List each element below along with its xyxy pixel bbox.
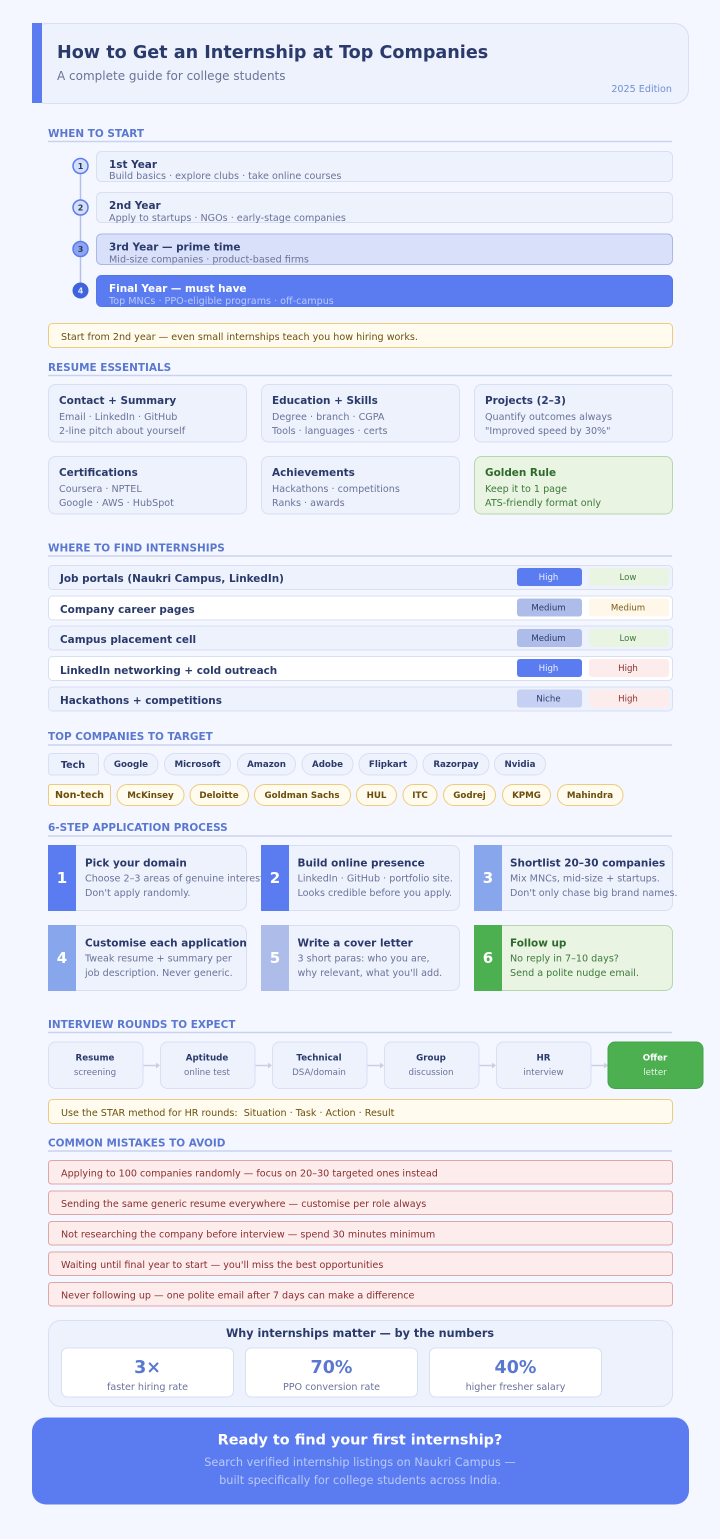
non-tech companies: [48, 784, 623, 806]
heading: application process: 6-STEP APPLICATION PROCESS: [48, 822, 228, 834]
year 1: [73, 152, 672, 182]
step 6: Follow up: [510, 938, 566, 950]
step 1: Don't apply randomly.: [85, 888, 190, 899]
step 6: 6: [483, 949, 493, 967]
edition label: 2025 Edition: [611, 84, 672, 95]
timeline: [72, 152, 672, 307]
round: aptitude: online test: [184, 1068, 231, 1078]
row: linkedin networking: [48, 656, 672, 680]
row: hackathons: Niche: [536, 694, 561, 704]
chip names: Goldman Sachs: [264, 791, 340, 801]
stat: ppo conversion: PPO conversion rate: [283, 1382, 380, 1393]
mistake 5: [48, 1282, 672, 1306]
cta text: built specifically for college students across India.: [219, 1474, 501, 1487]
chip names: Flipkart: [369, 760, 407, 770]
heading: top companies: TOP COMPANIES TO TARGET: [48, 731, 214, 743]
stat: hiring rate: 3×: [134, 1358, 161, 1378]
stat: hiring rate: faster hiring rate: [107, 1382, 188, 1393]
process steps: [48, 845, 678, 991]
round: resume: screening: [74, 1068, 116, 1078]
round: resume: [48, 1042, 143, 1088]
tip: star method: Use the STAR method for HR rounds: Situation · Task · Action · Result: [61, 1108, 395, 1119]
card: education: Tools · languages · certs: [271, 426, 387, 437]
year 2: Apply to startups · NGOs · early-stage companies: [109, 213, 346, 224]
stat: salary: 40%: [495, 1358, 536, 1378]
step 2: Looks credible before you apply.: [298, 888, 452, 899]
label: non-tech: [48, 784, 110, 806]
stat: ppo conversion: [246, 1348, 418, 1397]
card: certifications: Coursera · NPTEL: [59, 484, 142, 495]
step 1: Choose 2–3 areas of genuine interest.: [85, 874, 267, 884]
chip names: HUL: [367, 791, 387, 801]
year 2: 2nd Year: [109, 200, 162, 212]
step 6: Send a polite nudge email.: [510, 968, 639, 979]
step 1: Pick your domain: [85, 858, 187, 870]
card: contact: Contact + Summary: [59, 395, 176, 407]
step 3: Don't only chase big brand names.: [510, 888, 678, 899]
chip names: ITC: [412, 791, 428, 801]
chips: [117, 784, 623, 806]
card: golden rule: Keep it to 1 page: [485, 484, 567, 495]
stat: hiring rate: [62, 1348, 234, 1397]
mistake 5: Never following up — one polite email after 7 days can make a difference: [61, 1290, 415, 1302]
card: golden rule: Golden Rule: [485, 467, 556, 479]
title: How to Get an Internship at Top Companies: [57, 43, 488, 63]
step 5: [261, 925, 460, 991]
chips: [104, 754, 546, 775]
heading: common mistakes: COMMON MISTAKES TO AVOID: [48, 1138, 226, 1150]
card: education: [262, 384, 460, 442]
step 6: No reply in 7–10 days?: [510, 954, 619, 964]
row: job portals: High: [539, 573, 558, 583]
card: certifications: Certifications: [59, 467, 138, 479]
stat: salary: higher fresher salary: [466, 1382, 566, 1393]
stat: salary: [430, 1348, 602, 1397]
year 3: 3: [78, 245, 83, 254]
card: contact: Email · LinkedIn · GitHub: [59, 412, 177, 423]
chip names: Godrej: [453, 791, 486, 801]
round: technical: Technical: [296, 1054, 342, 1064]
step 3: 3: [483, 869, 493, 887]
step 2: [261, 845, 460, 911]
step 4: job description. Never generic.: [84, 968, 233, 979]
tech companies: [48, 754, 546, 775]
row: linkedin networking: LinkedIn networking + cold outreach: [60, 665, 277, 677]
label: non-tech: Non-tech: [55, 790, 104, 801]
row: career pages: Medium: [531, 604, 566, 614]
call to action: [32, 1418, 689, 1504]
tip: start early: Start from 2nd year — even small internships teach you how hiring works.: [61, 332, 418, 343]
header panel: [32, 23, 688, 104]
step 4: Customise each application: [85, 938, 247, 950]
row: linkedin networking: High: [618, 664, 638, 674]
card: certifications: Google · AWS · HubSpot: [59, 498, 174, 509]
subtitle: A complete guide for college students: [57, 69, 286, 83]
step 3: [474, 845, 678, 911]
step 6: [474, 925, 672, 991]
round: group: Group: [416, 1054, 446, 1064]
round: aptitude: Aptitude: [186, 1054, 228, 1064]
card: projects: [474, 384, 672, 442]
label: tech: Tech: [61, 760, 85, 771]
year 4: 4: [78, 286, 84, 296]
card: projects: Quantify outcomes always: [485, 412, 612, 423]
year 3: 3rd Year — prime time: [109, 242, 240, 254]
card: certifications: [48, 456, 246, 514]
mistake 4: Waiting until final year to start — you'll miss the best opportunities: [61, 1260, 383, 1271]
round: technical: DSA/domain: [292, 1068, 346, 1078]
step 3: Shortlist 20–30 companies: [510, 858, 665, 870]
heading: resume essentials: RESUME ESSENTIALS: [48, 362, 171, 374]
heading: where to find: WHERE TO FIND INTERNSHIPS: [48, 542, 225, 554]
row: hackathons: [48, 687, 672, 711]
row: job portals: [48, 566, 672, 590]
stats panel: [48, 1320, 672, 1406]
chip names: Deloitte: [199, 791, 239, 801]
row: career pages: [48, 596, 672, 620]
row: hackathons: Hackathons + competitions: [60, 695, 222, 707]
cta title: Ready to find your first internship?: [218, 1432, 502, 1448]
step 2: LinkedIn · GitHub · portfolio site.: [298, 874, 453, 884]
stat: ppo conversion: 70%: [311, 1358, 352, 1378]
mistake 4: [48, 1252, 672, 1276]
row: hackathons: High: [618, 694, 638, 704]
year 1: 1st Year: [109, 159, 158, 171]
mistake 1: [48, 1160, 672, 1184]
card: education: Degree · branch · CGPA: [272, 412, 385, 423]
round: hr: [496, 1042, 591, 1088]
chip names: Google: [114, 760, 148, 770]
row: campus cell: Low: [620, 634, 636, 644]
row: job portals: Low: [620, 573, 636, 583]
row: campus cell: Campus placement cell: [60, 634, 196, 646]
step 2: Build online presence: [298, 858, 425, 870]
year 4: Final Year — must have: [109, 283, 246, 295]
card: achievements: Ranks · awards: [272, 498, 345, 509]
row: career pages: Medium: [611, 604, 645, 614]
card: achievements: Hackathons · competitions: [272, 484, 400, 495]
round: offer: [608, 1042, 703, 1088]
card: achievements: Achievements: [272, 467, 355, 479]
year 2: [73, 192, 672, 224]
chip names: McKinsey: [127, 791, 174, 801]
mistake 2: Sending the same generic resume everywhere — customise per role always: [61, 1199, 426, 1210]
row: linkedin networking: High: [539, 664, 558, 674]
chip names: [114, 760, 536, 770]
chip names: Microsoft: [174, 760, 221, 770]
cta text: Search verified internship listings on Naukri Campus —: [204, 1456, 516, 1469]
row: campus cell: [48, 626, 672, 650]
chip names: Mahindra: [567, 791, 613, 801]
year 1: Build basics · explore clubs · take online courses: [109, 171, 341, 182]
step 5: why relevant, what you'll add.: [298, 968, 442, 979]
card: education: Education + Skills: [272, 395, 378, 407]
chip names: Razorpay: [433, 760, 479, 770]
step 5: 3 short paras: who you are,: [298, 954, 430, 964]
chip names: KPMG: [512, 791, 541, 801]
year 2: 2: [78, 204, 83, 212]
round: hr: HR: [537, 1054, 551, 1064]
step 5: Write a cover letter: [298, 938, 414, 950]
mistake 3: [48, 1222, 672, 1245]
row: job portals: Job portals (Naukri Campus, LinkedIn): [59, 573, 284, 585]
year 4: Top MNCs · PPO-eligible programs · off-campus: [108, 296, 334, 307]
step 4: Tweak resume + summary per: [84, 954, 232, 964]
mistakes list: [48, 1160, 672, 1306]
round: offer: letter: [643, 1068, 667, 1078]
step 2: 2: [270, 869, 280, 887]
mistake 3: Not researching the company before interview — spend 30 minutes minimum: [61, 1230, 435, 1240]
internship sources table: [48, 566, 672, 711]
card: projects: Projects (2–3): [485, 395, 566, 407]
mistake 2: [48, 1191, 672, 1214]
cta text: [204, 1456, 516, 1487]
heading: interview rounds: INTERVIEW ROUNDS TO EXPECT: [48, 1019, 236, 1031]
arrows: [143, 1062, 608, 1068]
step 3: Mix MNCs, mid-size + startups.: [510, 874, 660, 884]
step 1: 1: [57, 869, 67, 887]
round: group: [384, 1042, 479, 1088]
row: campus cell: Medium: [531, 634, 566, 644]
card: contact: 2-line pitch about yourself: [59, 426, 186, 437]
chip names: Nvidia: [505, 760, 536, 770]
round: resume: Resume: [76, 1054, 115, 1064]
card: projects: "Improved speed by 30%": [485, 426, 611, 437]
chip names: Adobe: [312, 760, 343, 770]
tip: star method: [48, 1100, 672, 1124]
tip: start early: [48, 324, 672, 348]
card: golden rule: ATS-friendly format only: [485, 498, 601, 509]
card: achievements: [262, 456, 460, 514]
round: technical: [272, 1042, 367, 1088]
stats title: Why internships matter — by the numbers: [226, 1327, 494, 1340]
resume cards: [48, 384, 672, 514]
year 3: [73, 234, 672, 266]
step 5: 5: [270, 949, 280, 967]
row: career pages: Company career pages: [60, 604, 195, 616]
label: tech: [48, 754, 98, 775]
step 1: [48, 845, 267, 911]
round: group: discussion: [408, 1068, 454, 1078]
card: golden rule: [474, 456, 672, 514]
mistake 1: Applying to 100 companies randomly — focus on 20–30 targeted ones instead: [61, 1168, 438, 1180]
step 4: 4: [57, 949, 67, 967]
round: hr: interview: [523, 1068, 564, 1078]
interview flow: [48, 1042, 703, 1088]
chip names: [127, 791, 613, 801]
step 4: [48, 925, 247, 991]
year 1: 1: [78, 162, 84, 171]
round: aptitude: [160, 1042, 255, 1088]
heading: when to start: WHEN TO START: [48, 128, 145, 140]
year 3: Mid-size companies · product-based firms: [109, 254, 309, 266]
chip names: Amazon: [247, 760, 286, 770]
card: contact: [48, 384, 246, 442]
round: offer: Offer: [643, 1054, 668, 1064]
year 4: [72, 276, 672, 307]
